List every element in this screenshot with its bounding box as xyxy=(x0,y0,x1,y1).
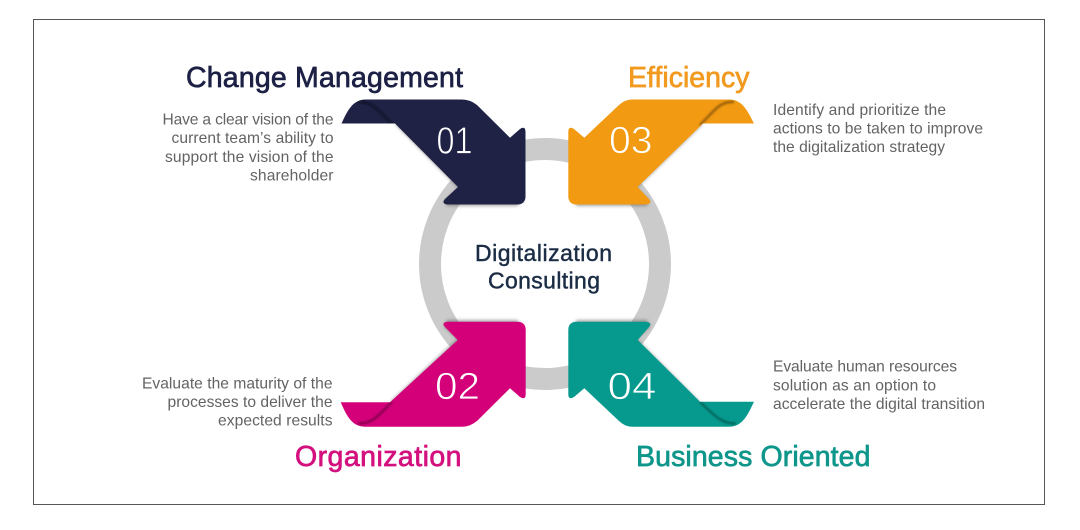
center label: Digitalization Consulting: Consulting xyxy=(488,268,600,294)
text block: Organization description: processes to deliver the xyxy=(168,394,332,411)
arrow 01: Change Management xyxy=(342,100,526,206)
heading: Business Oriented: Business Oriented xyxy=(636,441,870,473)
text block: Change Management description xyxy=(162,112,334,184)
text block: Business Oriented description xyxy=(773,358,985,413)
text block: Efficiency description: Identify and prioritize the xyxy=(773,102,946,119)
number 03: 03 xyxy=(609,120,652,162)
text block: Organization description: expected results xyxy=(218,412,333,430)
arrow 03: Efficiency xyxy=(568,100,754,206)
text block: Business Oriented description: Evaluate human resources xyxy=(773,358,957,376)
number 01: 01 xyxy=(436,120,472,162)
arrow 02: Organization xyxy=(341,320,526,427)
text block: Organization description: Evaluate the maturity of the xyxy=(142,376,332,392)
center label: Digitalization Consulting xyxy=(475,240,612,294)
number 04: 04 xyxy=(608,366,656,408)
text block: Organization description xyxy=(142,376,333,430)
heading: Change Management: Change Management xyxy=(186,62,463,94)
text block: Change Management description: current team’s ability to xyxy=(172,130,334,147)
text block: Efficiency description: the digitalization strategy xyxy=(773,139,945,156)
heading: Efficiency: Efficiency xyxy=(628,62,750,94)
number 02: 02 xyxy=(435,366,480,408)
center label: Digitalization Consulting: Digitalization xyxy=(475,240,612,266)
text block: Change Management description: shareholder xyxy=(250,168,334,184)
text block: Efficiency description: actions to be taken to improve xyxy=(773,120,983,138)
arrow 04: Business Oriented xyxy=(568,320,754,427)
central ring xyxy=(430,149,660,379)
text block: Change Management description: Have a clear vision of the xyxy=(162,112,334,128)
heading: Organization: Organization xyxy=(295,441,462,473)
text block: Efficiency description xyxy=(773,102,983,156)
text block: Business Oriented description: solution as an option to xyxy=(773,378,936,394)
text block: Business Oriented description: accelerate the digital transition xyxy=(773,396,985,413)
text block: Change Management description: support the vision of the xyxy=(165,149,334,166)
